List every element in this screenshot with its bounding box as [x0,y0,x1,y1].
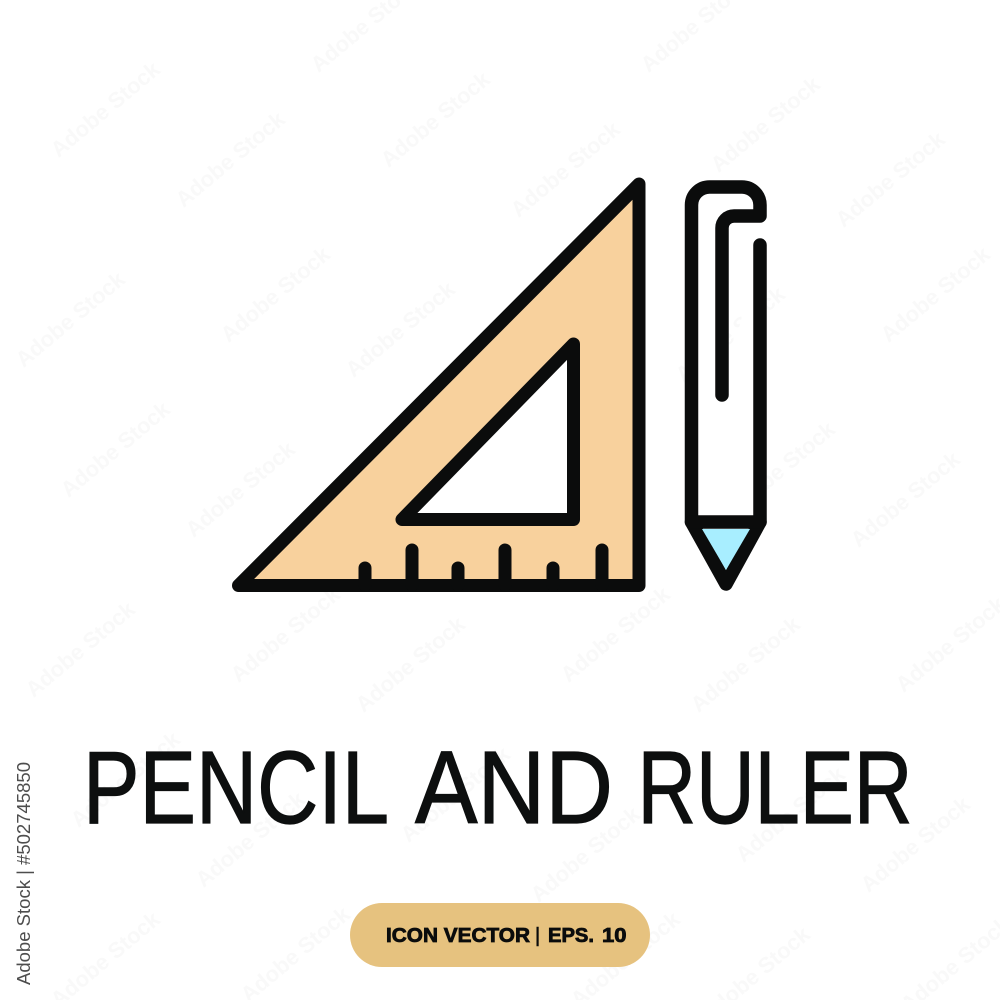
watermark pattern: Adobe Stock [396,741,515,847]
watermark pattern: Adobe Stock [706,71,825,177]
badge label [386,925,626,947]
watermark pattern: Adobe Stock [171,106,290,212]
title: PENCIL [83,730,389,845]
pencil blue tip [702,529,750,570]
watermark pattern: Adobe Stock [226,581,345,687]
watermark pattern: Adobe Stock [376,66,495,172]
pencil body [692,187,760,584]
watermark pattern: Adobe Stock [876,241,995,347]
watermark pattern: Adobe Stock [556,581,675,687]
watermark pattern: Adobe Stock [506,116,625,222]
badge label: | [535,925,540,947]
ruler body with triangular cut-out [238,184,639,586]
watermark pattern: Adobe Stock [46,56,165,162]
badge: icon vector [350,903,650,967]
watermark pattern: Adobe Stock [731,761,850,867]
icon: triangle ruler [238,184,639,586]
badge background [350,903,650,967]
watermark pattern: Adobe Stock [66,726,185,832]
badge label: ICON VECTOR [386,925,531,947]
watermark pattern: Adobe Stock [216,241,335,347]
icon: pencil [692,187,760,584]
side credit text: Adobe Stock | #502745850 [14,762,34,985]
ruler tick marks [365,550,602,585]
badge label: EPS. [548,925,594,947]
watermark pattern: Adobe Stock [341,276,460,382]
watermark pattern: Adobe Stock [56,396,175,502]
pencil tip collar [692,515,760,529]
watermark pattern: Adobe Stock [191,786,310,892]
watermark pattern: Adobe Stock [526,801,645,907]
watermark pattern: Adobe Stock [11,266,130,372]
watermark pattern: Adobe Stock [846,446,965,552]
title: AND [415,730,613,845]
watermark pattern: Adobe Stock [671,281,790,387]
badge label: 10 [602,925,626,947]
watermark pattern: Adobe Stock [181,436,300,542]
title: RULER [638,730,912,845]
title [83,730,912,845]
watermark pattern: Adobe Stock [721,416,840,522]
watermark pattern: Adobe Stock [831,126,950,232]
watermark pattern: Adobe Stock [21,596,140,702]
watermark pattern: Adobe Stock [351,611,470,717]
watermark pattern: Adobe Stock [686,611,805,717]
watermark pattern: Adobe Stock [856,791,975,897]
